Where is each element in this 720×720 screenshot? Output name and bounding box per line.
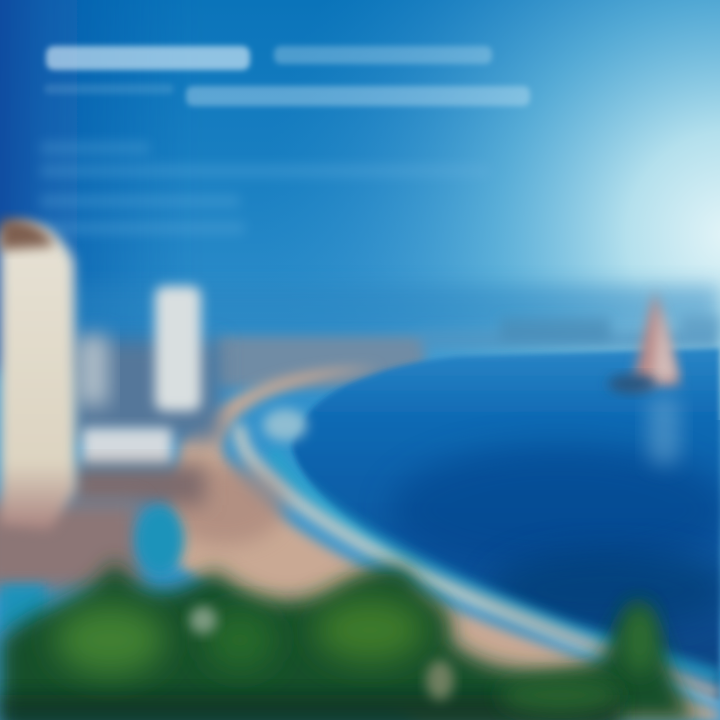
lagoon pools — [0, 506, 184, 629]
mid-ground buildings — [70, 286, 220, 505]
blurred headline (illegible in the reference) — [44, 46, 530, 106]
tall foreground tower — [0, 219, 76, 530]
distant shoreline and skyline — [215, 316, 720, 388]
bay water — [272, 348, 720, 700]
lower-left ground behind the tower — [0, 500, 140, 590]
sailboat and reflection — [608, 290, 680, 465]
blurred body text (illegible in the reference) — [40, 142, 490, 234]
foreground palm foliage — [0, 560, 700, 720]
beach curve — [165, 368, 720, 720]
